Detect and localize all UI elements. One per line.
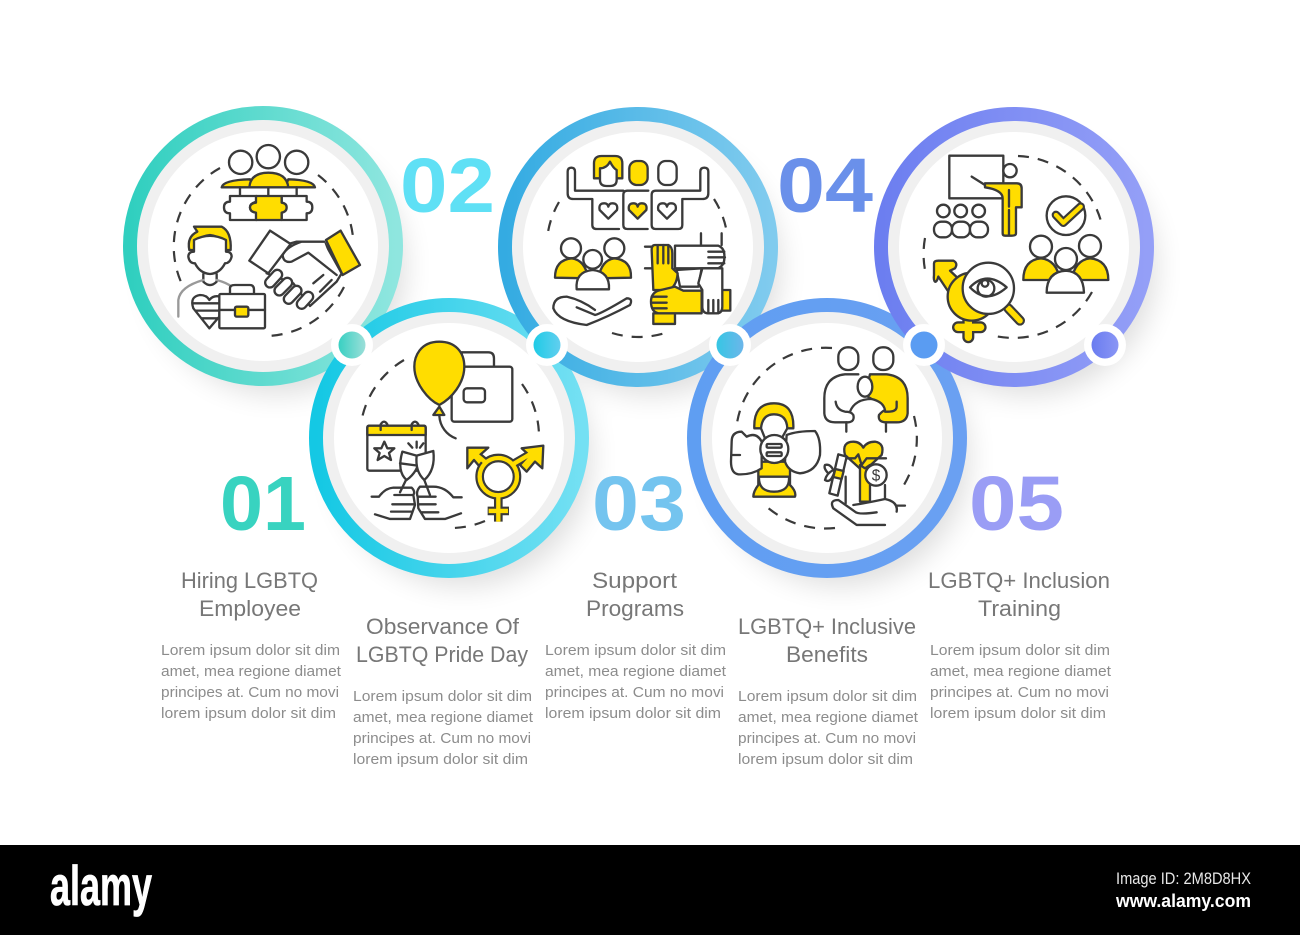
dashed orbit 3 bbox=[548, 199, 726, 337]
body text 3: Lorem ipsum dolor sit dim bbox=[545, 642, 726, 659]
title 4: Benefits bbox=[786, 642, 868, 667]
ring 2 bbox=[316, 305, 582, 571]
number 05: 05 bbox=[969, 461, 1064, 547]
title 4 bbox=[738, 614, 916, 667]
body text 3: principes at. Cum no movi bbox=[545, 684, 724, 701]
body text 2: lorem ipsum dolor sit dim bbox=[353, 751, 528, 768]
ring 1 bbox=[130, 113, 396, 379]
number 03: 03 bbox=[592, 461, 686, 547]
body text 5: principes at. Cum no movi bbox=[930, 684, 1109, 701]
body text 3: lorem ipsum dolor sit dim bbox=[545, 705, 721, 722]
body text 3 bbox=[545, 642, 727, 722]
body text 2: amet, mea regione diamet bbox=[353, 709, 534, 726]
ring 5 bbox=[881, 114, 1147, 380]
body text 4: Lorem ipsum dolor sit dim bbox=[738, 688, 917, 705]
title 1 bbox=[181, 568, 318, 621]
title 3: Support bbox=[592, 568, 677, 593]
body text 1: lorem ipsum dolor sit dim bbox=[161, 705, 336, 722]
body text 2 bbox=[353, 688, 534, 768]
body text 1: amet, mea regione diamet bbox=[161, 663, 342, 680]
body text 4: principes at. Cum no movi bbox=[738, 730, 916, 747]
body text 5: lorem ipsum dolor sit dim bbox=[930, 705, 1106, 722]
body text 4 bbox=[738, 688, 919, 768]
title 1: Hiring LGBTQ bbox=[181, 568, 318, 593]
title 4: LGBTQ+ Inclusive bbox=[738, 614, 916, 639]
icon: team, employee, handshake bbox=[178, 145, 360, 328]
title 5: LGBTQ+ Inclusion bbox=[928, 568, 1110, 593]
title 2: LGBTQ Pride Day bbox=[356, 642, 528, 667]
body text 1 bbox=[161, 642, 342, 722]
body text 5: amet, mea regione diamet bbox=[930, 663, 1112, 680]
body text 4: lorem ipsum dolor sit dim bbox=[738, 751, 913, 768]
number 04: 04 bbox=[777, 143, 873, 229]
title 1: Employee bbox=[199, 596, 301, 621]
image id: Image ID: 2M8D8HX bbox=[1116, 869, 1251, 888]
panel: step 4 inclusive benefits bbox=[694, 143, 960, 768]
body text 1: Lorem ipsum dolor sit dim bbox=[161, 642, 340, 659]
icon: couple, equality, benefits gift: $ bbox=[872, 468, 881, 485]
website: www.alamy.com bbox=[1115, 891, 1251, 911]
dashed orbit 2 bbox=[362, 360, 539, 528]
number 02: 02 bbox=[400, 143, 495, 229]
panel: step 1 hiring LGBTQ employee bbox=[130, 113, 396, 722]
icon: couple, equality, benefits gift bbox=[731, 347, 908, 525]
footer bar bbox=[0, 845, 1300, 935]
panel: step 5 inclusion training bbox=[881, 114, 1147, 722]
body text 2: principes at. Cum no movi bbox=[353, 730, 531, 747]
body text 4: amet, mea regione diamet bbox=[738, 709, 919, 726]
icon: balloon, calendar, toast, trans symbol bbox=[367, 342, 543, 522]
dashed orbit 5 bbox=[924, 156, 1102, 338]
body text 1: principes at. Cum no movi bbox=[161, 684, 339, 701]
body text 3: amet, mea regione diamet bbox=[545, 663, 727, 680]
dashed orbit 4 bbox=[737, 348, 917, 529]
body text 5: Lorem ipsum dolor sit dim bbox=[930, 642, 1110, 659]
panel: step 3 support programs bbox=[505, 114, 771, 722]
title 2 bbox=[356, 614, 528, 667]
title 3 bbox=[586, 568, 684, 621]
ring 3 bbox=[505, 114, 771, 380]
icon: support group, hearts, joined hands bbox=[553, 156, 730, 325]
ring 4 bbox=[694, 305, 960, 571]
connector nodes bbox=[331, 324, 1126, 366]
title 5 bbox=[928, 568, 1110, 621]
title 3: Programs bbox=[586, 596, 684, 621]
body text 5 bbox=[930, 642, 1112, 722]
alamy logo: alamy bbox=[50, 854, 152, 917]
title 5: Training bbox=[978, 596, 1061, 621]
body text 2: Lorem ipsum dolor sit dim bbox=[353, 688, 532, 705]
dashed orbit 1 bbox=[174, 168, 353, 336]
panel: step 2 observance of pride day bbox=[316, 143, 582, 768]
icon: trainer, audience, check, gender symbol under magnifier bbox=[934, 156, 1108, 337]
title 2: Observance Of bbox=[366, 614, 520, 639]
number 01: 01 bbox=[220, 461, 306, 547]
